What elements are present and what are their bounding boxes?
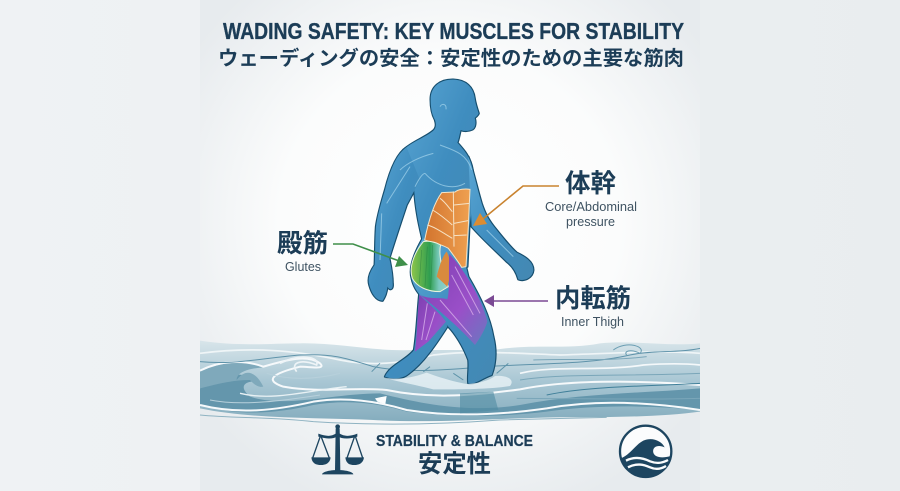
label: glutes: Glutes bbox=[285, 260, 321, 274]
foreground water at feet bbox=[372, 363, 512, 389]
caption bbox=[376, 433, 533, 478]
core muscles bbox=[425, 189, 470, 267]
glutes bbox=[411, 241, 450, 292]
body silhouette bbox=[369, 80, 533, 384]
caption: STABILITY & BALANCE bbox=[376, 433, 533, 450]
human figure bbox=[369, 80, 533, 384]
body highlights bbox=[380, 104, 513, 260]
water waves (behind figure) bbox=[200, 341, 700, 424]
label: core: Core/Abdominal bbox=[545, 200, 637, 214]
title: ウェーディングの安全：安定性のための主要な筋肉 bbox=[218, 46, 684, 70]
title: WADING SAFETY: KEY MUSCLES FOR STABILITY bbox=[223, 18, 684, 44]
icon: balance scale bbox=[311, 424, 364, 474]
label: glutes bbox=[277, 230, 328, 274]
label: core: 体幹 bbox=[565, 170, 616, 198]
arrow: core bbox=[473, 186, 559, 226]
inner thigh muscles bbox=[415, 254, 487, 352]
arrow: inner thigh bbox=[484, 295, 548, 307]
label: inner thigh: 内転筋 bbox=[555, 285, 631, 313]
caption: 安定性 bbox=[418, 450, 491, 478]
label: core: pressure bbox=[566, 215, 615, 229]
label: inner thigh bbox=[555, 285, 631, 329]
label: core bbox=[545, 170, 637, 229]
label: glutes: 殿筋 bbox=[277, 230, 328, 258]
icon: wave badge bbox=[620, 426, 671, 477]
title bbox=[218, 18, 684, 70]
label: inner thigh: Inner Thigh bbox=[561, 315, 624, 329]
arrow: glutes bbox=[333, 244, 408, 267]
